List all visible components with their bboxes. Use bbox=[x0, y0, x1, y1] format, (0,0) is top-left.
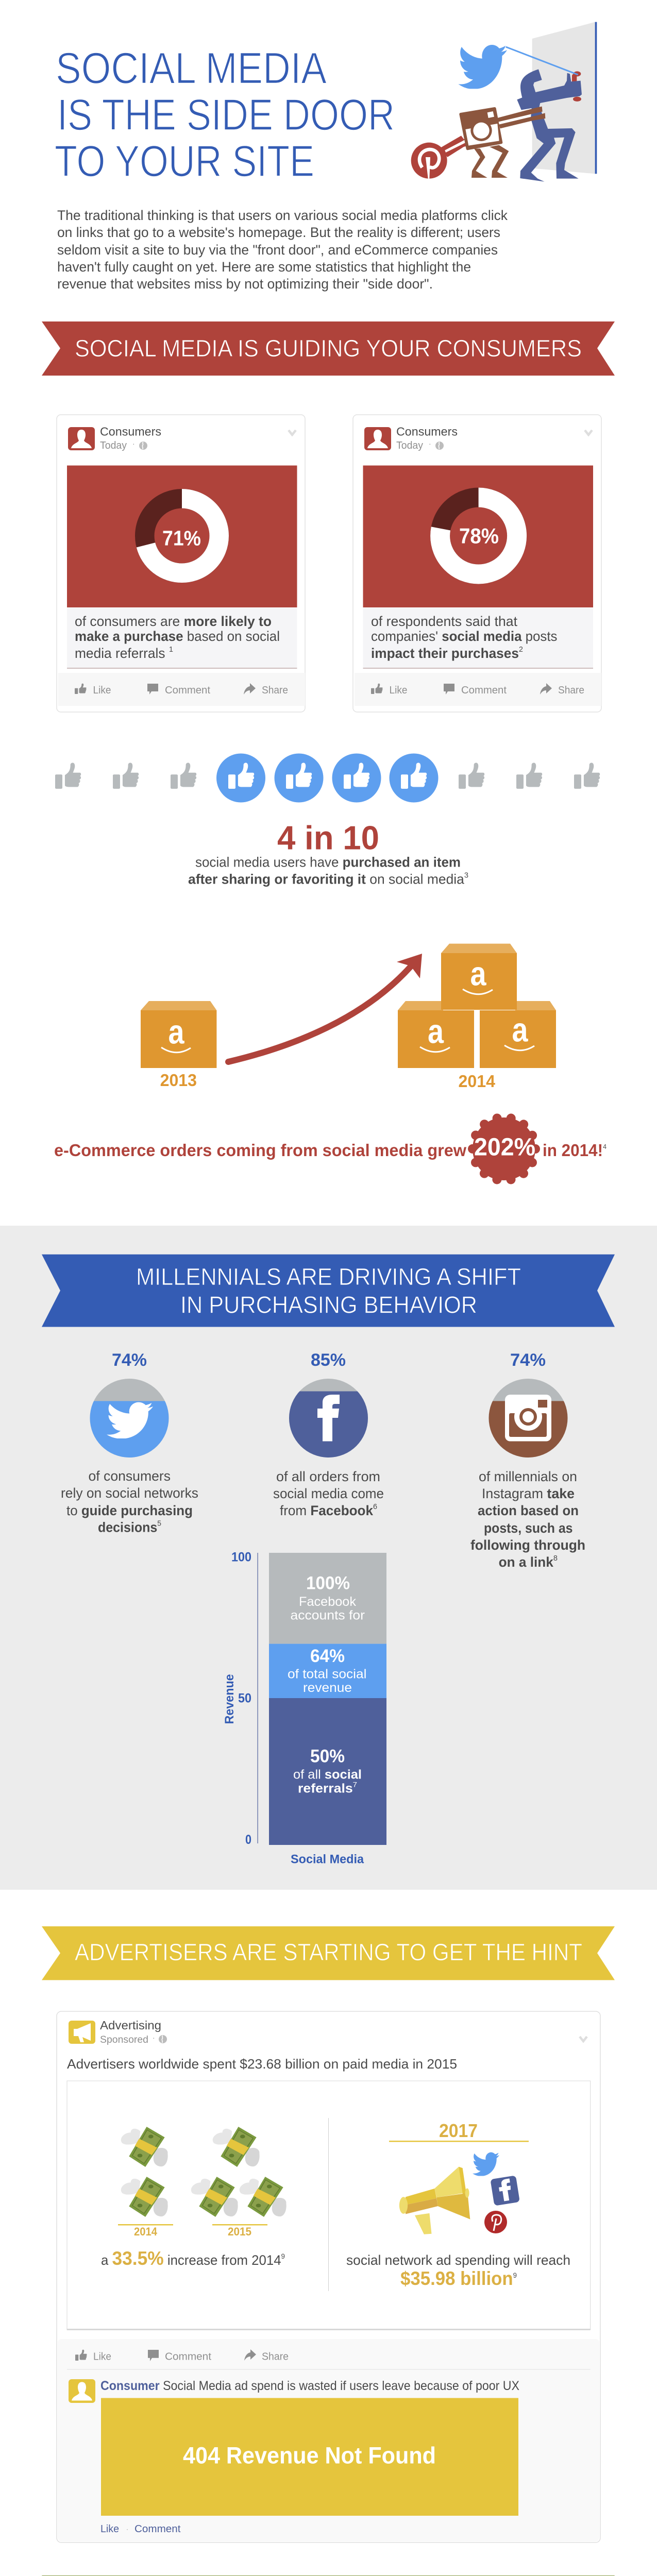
caption: 78%: impact their purchases bbox=[371, 646, 524, 661]
bar segment: 64%: of total social bbox=[288, 1667, 367, 1682]
bar segment: 100%: 100% bbox=[306, 1573, 350, 1594]
bar segment: 50% bbox=[269, 1698, 386, 1845]
icon: twitter bbox=[88, 1379, 171, 1460]
illustration: amazon box 2013 bbox=[141, 1001, 216, 1090]
icon: facebook bbox=[287, 1379, 370, 1461]
stat: twitter 74%: 74% bbox=[112, 1350, 147, 1370]
post author: Sponsored bbox=[100, 2035, 148, 2045]
banner: advertisers: ADVERTISERS ARE STARTING TO GET THE HINT bbox=[75, 1939, 582, 1965]
stat: instagram 74% bbox=[470, 1350, 585, 1570]
chart: revenue stacked bar: 100 bbox=[231, 1550, 251, 1565]
panel: millennials section background bbox=[0, 1226, 657, 1890]
action bar: Like bbox=[93, 685, 111, 696]
banner: advertisers bbox=[42, 1926, 615, 1980]
stat: instagram 74%: 8 bbox=[553, 1554, 558, 1563]
illustration: amazon boxes 2014: 2014 bbox=[459, 1072, 496, 1091]
chart: revenue stacked bar bbox=[223, 1550, 386, 1866]
stat: 4 in 10: after sharing or favoriting it on social media bbox=[188, 872, 466, 887]
banner: millennials: IN PURCHASING BEHAVIOR bbox=[180, 1291, 477, 1318]
stat: facebook 85%: social media come bbox=[273, 1486, 384, 1501]
icon: flying money bbox=[121, 2127, 287, 2217]
title: TO YOUR SITE bbox=[55, 137, 314, 186]
action bar: Share bbox=[262, 685, 288, 696]
stat: 33.5% increase: a 33.5% increase from 2014 bbox=[101, 2248, 287, 2269]
action bar: Comment bbox=[165, 685, 210, 696]
banner: social media is guiding your consumers: SOCIAL MEDIA IS GUIDING YOUR CONSUMERS bbox=[75, 335, 582, 362]
icon row: 4 in 10 thumbs bbox=[55, 753, 600, 803]
banner: anticipating the future bbox=[42, 2575, 615, 2576]
caption: 78% bbox=[363, 608, 593, 669]
post author: Consumers bbox=[100, 425, 161, 438]
action bar bbox=[355, 673, 601, 706]
post author: Today bbox=[396, 440, 423, 451]
post author: · bbox=[153, 2033, 155, 2042]
arrow: growth bbox=[228, 954, 422, 1062]
panel: 404 revenue not found bbox=[101, 2398, 518, 2516]
icon: advertising avatar bbox=[69, 2021, 95, 2044]
stat: twitter 74%: decisions bbox=[98, 1520, 162, 1535]
stat: instagram 74%: of millennials on bbox=[479, 1469, 577, 1484]
year labels: 2015 bbox=[228, 2225, 251, 2238]
title bbox=[55, 44, 395, 186]
caption: 71%: of consumers are more likely to bbox=[75, 614, 272, 629]
donut chart: 78% bbox=[363, 466, 593, 607]
callout: e-commerce orders grew 202% bbox=[54, 1117, 607, 1180]
stat: 35.98 billion bbox=[346, 2252, 570, 2289]
comment: consumer: Comment bbox=[134, 2523, 181, 2535]
illustration: amazon boxes 2014: a bbox=[512, 1011, 529, 1049]
callout: e-commerce orders grew 202%: in 2014! bbox=[543, 1141, 606, 1160]
panel: consumers post 78% bbox=[353, 415, 601, 712]
illustration: amazon boxes 2014: a bbox=[470, 955, 487, 993]
intro paragraph: haven't fully caught on yet. Here are some statistics that highlight the bbox=[57, 259, 471, 275]
stat: instagram 74%: 74% bbox=[510, 1350, 546, 1370]
stat: facebook 85%: 6 bbox=[373, 1502, 377, 1511]
illustration: social icons forcing the side door bbox=[411, 22, 597, 182]
banner: millennials: MILLENNIALS ARE DRIVING A SHIFT bbox=[136, 1263, 521, 1290]
chart: revenue stacked bar: Social Media bbox=[291, 1853, 364, 1866]
icon: megaphone bbox=[399, 2167, 470, 2234]
icon: instagram bbox=[486, 1379, 570, 1460]
action bar: Comment bbox=[165, 2351, 211, 2363]
post author bbox=[100, 2019, 587, 2045]
caption: 71%: make a purchase based on social bbox=[75, 629, 280, 644]
stat: 4 in 10: social media users have purchased an item bbox=[195, 854, 461, 870]
post author: Advertising bbox=[100, 2019, 161, 2032]
stat: twitter 74%: to guide purchasing bbox=[66, 1503, 193, 1518]
badge: 202%: 202% bbox=[474, 1134, 535, 1161]
action bar: Comment bbox=[461, 685, 507, 696]
action bar: Like bbox=[93, 2351, 111, 2363]
stat: twitter 74%: of consumers bbox=[89, 1468, 171, 1484]
stat: facebook 85%: of all orders from bbox=[276, 1469, 380, 1484]
illustration: amazon box 2013: 2013 bbox=[160, 1071, 197, 1090]
donut chart: 78%: 78% bbox=[459, 523, 499, 548]
stat: 4 in 10: 4 in 10 bbox=[277, 819, 379, 856]
caption: 71% bbox=[67, 608, 297, 669]
year labels bbox=[118, 2224, 267, 2238]
bar segment: 100% bbox=[269, 1553, 386, 1644]
panel: advertising post bbox=[57, 2011, 600, 2543]
comment: consumer: Consumer Social Media ad spend is wasted if users leave because of poor UX bbox=[100, 2379, 519, 2393]
heading: 2017: 2017 bbox=[439, 2120, 478, 2141]
caption: 78%: of respondents said that bbox=[371, 614, 517, 629]
stat: 35.98 billion: social network ad spending will reach bbox=[346, 2252, 570, 2268]
chart: revenue stacked bar: 50 bbox=[238, 1691, 251, 1705]
bar segment: 100%: Facebook bbox=[299, 1595, 356, 1609]
panel: ad stats bbox=[67, 2081, 591, 2330]
comment: consumer bbox=[69, 2379, 519, 2535]
intro paragraph bbox=[57, 208, 508, 292]
action bar: Share bbox=[262, 2351, 289, 2363]
stat: instagram 74%: on a link bbox=[499, 1554, 555, 1570]
post author bbox=[396, 425, 592, 451]
post text: Advertisers worldwide spent $23.68 billion on paid media in 2015 bbox=[67, 2056, 457, 2072]
intro paragraph: The traditional thinking is that users on various social media platforms click bbox=[57, 208, 508, 223]
illustration: amazon boxes 2014 bbox=[398, 944, 556, 1091]
intro paragraph: on links that go to a website's homepage. But the reality is different; users bbox=[57, 225, 500, 240]
stat: twitter 74%: 5 bbox=[157, 1519, 161, 1528]
year labels: 2014 bbox=[134, 2225, 158, 2238]
stat: 35.98 billion: $35.98 billion bbox=[400, 2268, 520, 2289]
bar segment: 100%: accounts for bbox=[291, 1608, 365, 1623]
caption: 78%: 2 bbox=[519, 645, 523, 654]
post author: Today bbox=[100, 440, 127, 451]
badge: 202% bbox=[473, 1117, 535, 1180]
stat: 4 in 10: 3 bbox=[464, 871, 468, 880]
callout: e-commerce orders grew 202%: e-Commerce orders coming from social media grew bbox=[54, 1141, 466, 1160]
intro paragraph: revenue that websites miss by not optimizing their "side door". bbox=[57, 276, 433, 292]
bar segment: 50%: of all social bbox=[293, 1768, 362, 1782]
action bar bbox=[58, 673, 305, 706]
stat: instagram 74%: Instagram take bbox=[482, 1486, 575, 1501]
icon: consumer avatar bbox=[364, 427, 391, 450]
action bar: Like bbox=[390, 685, 407, 696]
icon: consumer avatar bbox=[68, 427, 95, 450]
stat: facebook 85%: 85% bbox=[311, 1350, 346, 1370]
stat: 33.5% increase: 9 bbox=[281, 2252, 285, 2260]
stat: 35.98 billion: 9 bbox=[513, 2271, 517, 2279]
stat: 4 in 10 bbox=[188, 819, 468, 887]
post author: · bbox=[429, 439, 431, 448]
bar segment: 64%: revenue bbox=[303, 1681, 352, 1695]
bar segment: 50%: 7 bbox=[353, 1780, 357, 1788]
stat: instagram 74%: following through bbox=[470, 1537, 585, 1553]
panel: 404 revenue not found: 404 Revenue Not Found bbox=[183, 2443, 436, 2469]
stat: facebook 85% bbox=[273, 1350, 384, 1518]
bar segment: 50%: 50% bbox=[310, 1747, 345, 1766]
post author: Consumers bbox=[396, 425, 458, 438]
comment: consumer: Like bbox=[100, 2523, 119, 2535]
stat: facebook 85%: from Facebook bbox=[280, 1503, 375, 1518]
bar segment: 64% bbox=[269, 1644, 386, 1698]
stat: twitter 74% bbox=[61, 1350, 198, 1535]
post author: · bbox=[132, 439, 135, 448]
icon: pinterest small bbox=[484, 2211, 507, 2233]
stat: instagram 74%: posts, such as bbox=[484, 1520, 573, 1536]
donut chart: 71%: 71% bbox=[162, 527, 201, 550]
bar segment: 64%: 64% bbox=[310, 1646, 345, 1666]
action bar bbox=[67, 2349, 591, 2370]
bar segment: 50%: referrals bbox=[298, 1781, 349, 1795]
illustration: amazon boxes 2014: a bbox=[428, 1012, 444, 1050]
banner: millennials bbox=[42, 1255, 615, 1327]
title: IS THE SIDE DOOR bbox=[57, 91, 395, 140]
post author bbox=[100, 425, 296, 451]
stat: twitter 74%: rely on social networks bbox=[61, 1485, 198, 1501]
chart: revenue stacked bar: 0 bbox=[245, 1833, 251, 1847]
panel: consumers post 71% bbox=[57, 415, 305, 712]
chart: revenue stacked bar: Revenue bbox=[223, 1674, 237, 1724]
donut chart: 71% bbox=[67, 466, 297, 607]
title: SOCIAL MEDIA bbox=[56, 44, 327, 93]
icon: facebook small bbox=[490, 2175, 520, 2206]
icon: twitter small bbox=[473, 2153, 499, 2176]
banner: social media is guiding your consumers bbox=[42, 321, 615, 376]
icon: consumer avatar bbox=[69, 2379, 95, 2403]
caption: 71%: 1 bbox=[169, 645, 173, 654]
caption: 71%: media referrals bbox=[75, 646, 167, 661]
callout: e-commerce orders grew 202%: 4 bbox=[603, 1143, 607, 1150]
stat: instagram 74%: action based on bbox=[478, 1503, 579, 1518]
action bar: Share bbox=[558, 685, 584, 696]
caption: 78%: companies' social media posts bbox=[371, 629, 558, 644]
illustration: amazon box 2013: a bbox=[168, 1013, 185, 1051]
intro paragraph: seldom visit a site to buy via the "front door", and eCommerce companies bbox=[57, 242, 498, 258]
comment: consumer: · bbox=[126, 2526, 128, 2533]
